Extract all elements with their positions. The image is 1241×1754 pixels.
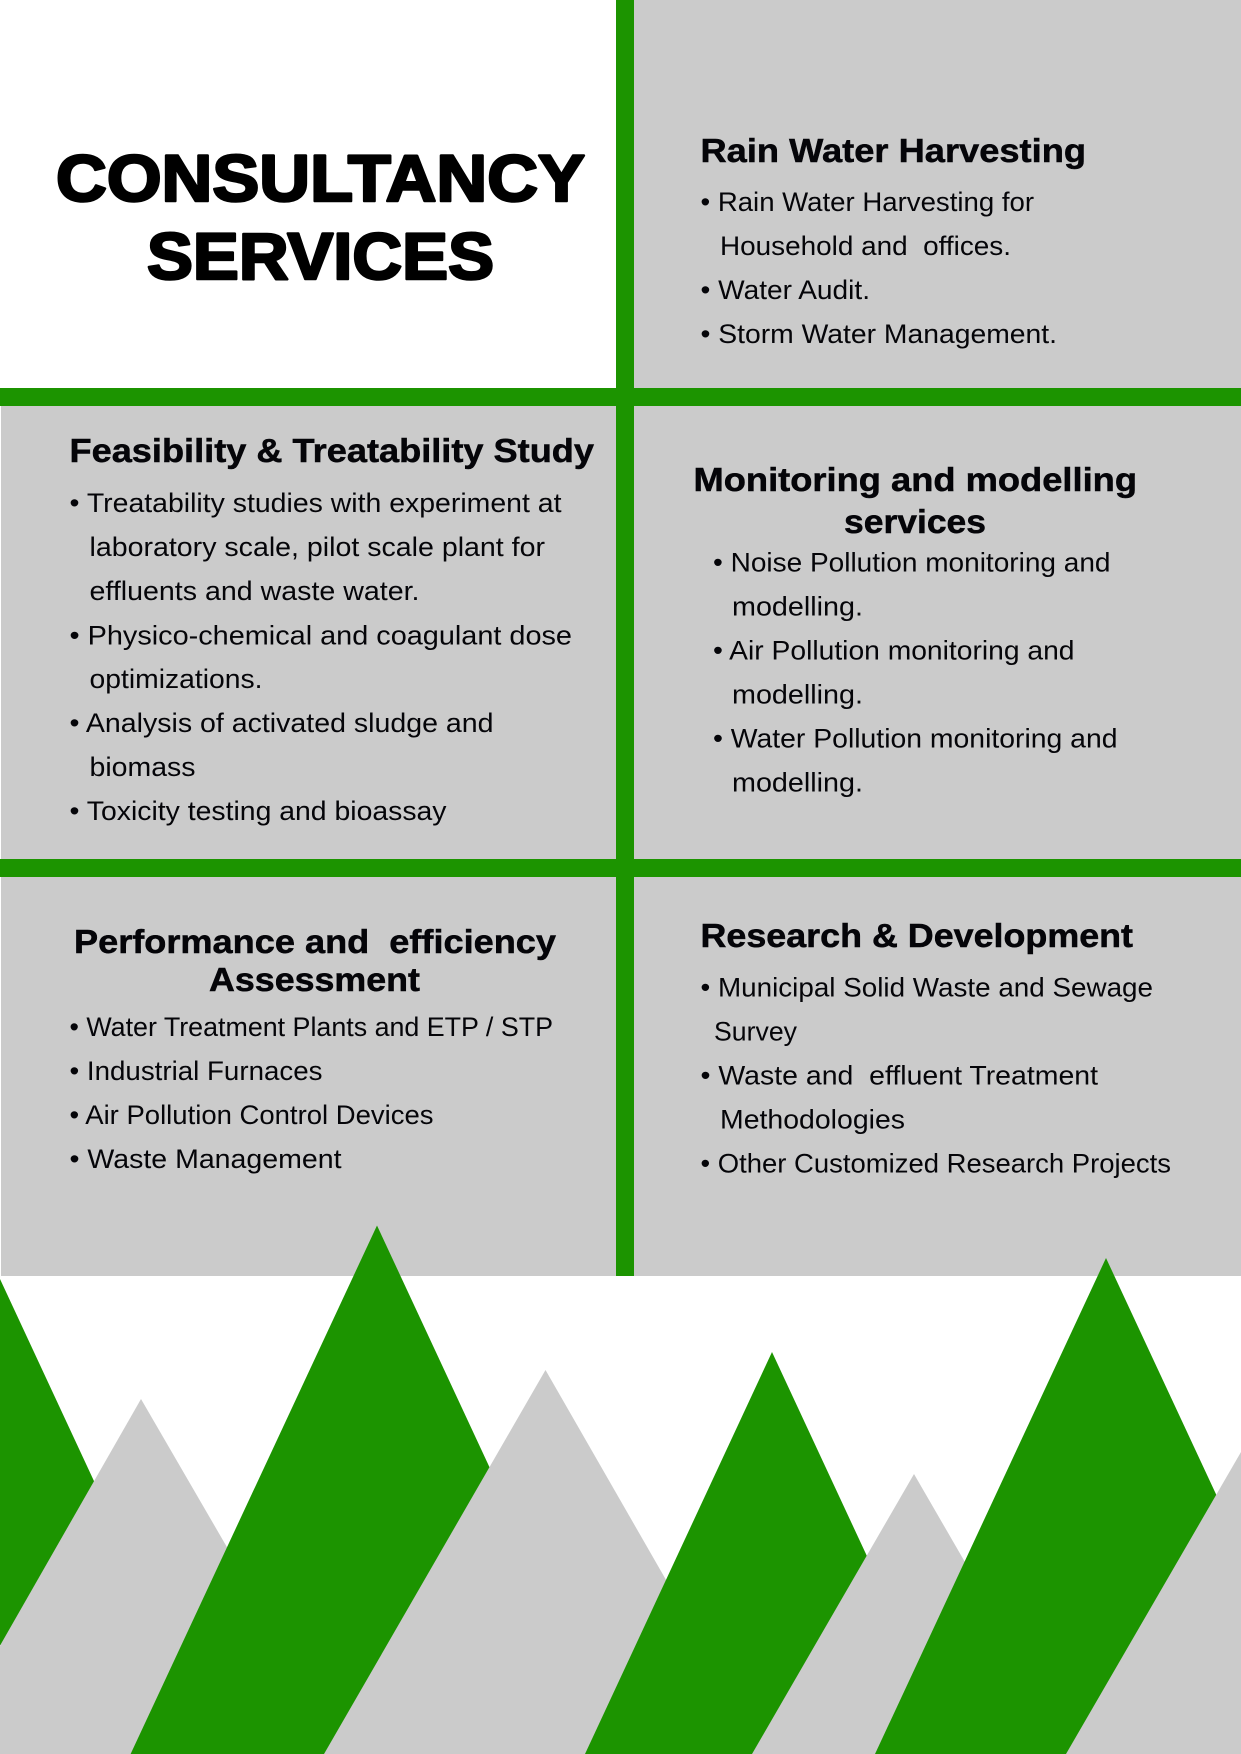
list: assessment services: • Industrial Furnaces <box>70 1056 322 1086</box>
list: monitoring services: • Air Pollution monitoring and <box>713 636 1074 666</box>
list: feasibility services: • Treatability studies with experiment at <box>70 488 562 518</box>
green grid dividers <box>0 0 1241 1276</box>
list: assessment services: • Air Pollution Control Devices <box>70 1100 434 1130</box>
list: feasibility services: biomass <box>90 752 196 782</box>
mountain: gray 1 <box>0 1399 347 1754</box>
panel: research and development <box>634 877 1241 1276</box>
list: monitoring services <box>713 548 1118 798</box>
list: research services: Methodologies <box>720 1104 905 1134</box>
list: feasibility services: effluents and waste water. <box>90 576 420 606</box>
heading: monitoring and modelling services: Monitoring and modelling <box>694 461 1137 498</box>
list: monitoring services: modelling. <box>732 592 863 622</box>
list: rain water services: • Storm Water Management. <box>700 319 1057 349</box>
mountain: green left <box>0 1279 120 1650</box>
list: monitoring services: modelling. <box>732 768 863 798</box>
list: research services <box>700 972 1171 1178</box>
list: assessment services <box>70 1012 553 1174</box>
heading: monitoring and modelling services <box>694 461 1137 540</box>
mountain: gray 2 <box>324 1370 766 1754</box>
list: assessment services: • Water Treatment Plants and ETP / STP <box>70 1012 553 1042</box>
list: rain water services: • Water Audit. <box>700 275 870 305</box>
mountain: green 4 <box>875 1258 1241 1754</box>
list: monitoring services: • Noise Pollution monitoring and <box>713 548 1110 578</box>
list: research services: • Municipal Solid Waste and Sewage <box>700 972 1153 1002</box>
mountain: gray 4 <box>1066 1452 1241 1754</box>
heading: performance and efficiency assessment <box>74 923 557 998</box>
title <box>56 141 585 293</box>
title: CONSULTANCY <box>56 141 585 215</box>
heading: rain water harvesting: Rain Water Harvesting <box>700 132 1086 169</box>
heading: research and development: Research & Development <box>700 917 1133 954</box>
panel: monitoring and modelling services <box>634 406 1241 859</box>
list: monitoring services: modelling. <box>732 680 863 710</box>
mountains illustration <box>0 1226 1241 1754</box>
heading: monitoring and modelling services: services <box>844 503 986 540</box>
heading: performance and efficiency assessment: Assessment <box>209 961 420 998</box>
mountain: green 2 <box>131 1226 623 1754</box>
list: feasibility services <box>70 488 572 826</box>
heading: feasibility and treatability study: Feasibility & Treatability Study <box>70 432 595 469</box>
list: feasibility services: • Toxicity testing and bioassay <box>70 796 447 826</box>
list: feasibility services: • Physico-chemical and coagulant dose <box>70 620 572 650</box>
mountain: gray 3 <box>752 1474 1076 1754</box>
heading: performance and efficiency assessment: Performance and efficiency <box>74 923 557 960</box>
list: rain water services: • Rain Water Harvesting for <box>700 187 1034 217</box>
list: research services: • Waste and effluent Treatment <box>700 1060 1099 1090</box>
title: SERVICES <box>147 219 494 293</box>
list: research services: Survey <box>714 1016 797 1046</box>
list: monitoring services: • Water Pollution monitoring and <box>713 724 1118 754</box>
list: feasibility services: optimizations. <box>90 664 262 694</box>
list: assessment services: • Waste Management <box>70 1144 342 1174</box>
list: feasibility services: • Analysis of activated sludge and <box>70 708 493 738</box>
panel: performance and efficiency assessment <box>1 877 616 1276</box>
panel: feasibility and treatability study <box>1 406 616 859</box>
mountain: green 3 <box>585 1352 959 1754</box>
panel: rain water harvesting <box>634 0 1241 388</box>
list: research services: • Other Customized Research Projects <box>700 1148 1171 1178</box>
list: rain water services <box>700 187 1057 349</box>
list: rain water services: Household and offices. <box>720 231 1011 261</box>
list: feasibility services: laboratory scale, pilot scale plant for <box>90 532 545 562</box>
